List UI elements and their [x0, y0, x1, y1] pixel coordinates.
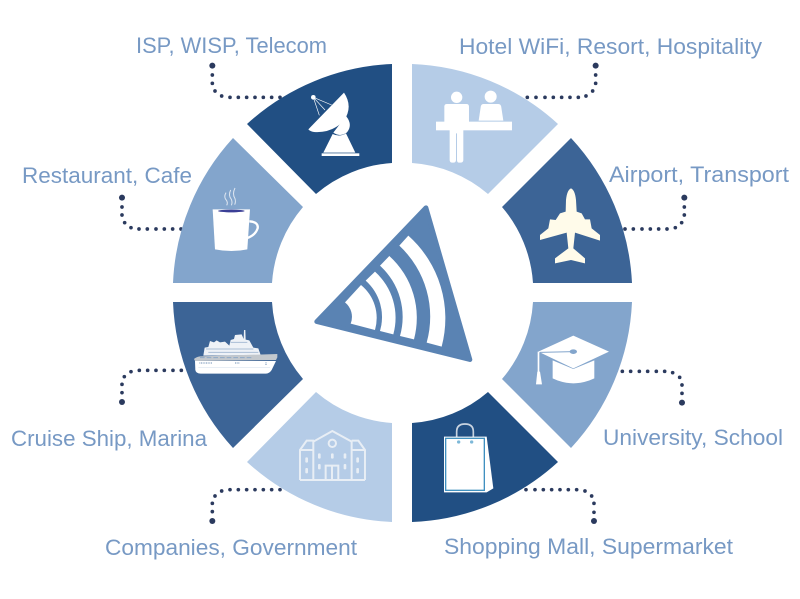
segment: Companies — [247, 392, 392, 522]
connector: Restaurant — [119, 195, 183, 231]
label: University: University, School — [603, 425, 783, 450]
icon: shopping bag — [444, 424, 493, 492]
connector: Hotel — [525, 63, 599, 99]
label: Companies: Companies, Government — [105, 535, 357, 560]
connector: Cruise — [119, 368, 183, 405]
icon: graduation cap — [536, 336, 609, 384]
connector: Shopping — [524, 488, 597, 524]
label: Hotel: Hotel WiFi, Resort, Hospitality — [459, 34, 762, 59]
segment: Airport — [502, 138, 632, 283]
segment: Hotel — [412, 64, 558, 194]
segment: Cruise — [173, 302, 303, 448]
icon: hotel reception — [436, 91, 512, 163]
connector: ISP — [209, 63, 282, 99]
icon: satellite dish — [308, 93, 359, 156]
connector: Airport — [623, 195, 687, 231]
icon: government building — [300, 431, 365, 480]
label: Shopping: Shopping Mall, Supermarket — [444, 534, 733, 559]
connector: Companies — [209, 488, 282, 524]
segment: Shopping — [412, 392, 558, 522]
connector: University — [620, 369, 685, 406]
icon: cruise ship — [194, 330, 277, 374]
label: ISP: ISP, WISP, Telecom — [136, 33, 327, 58]
label: Airport: Airport, Transport — [609, 162, 789, 187]
central wifi signal triangle — [317, 208, 470, 360]
segment: University — [502, 302, 632, 448]
segment: Restaurant — [173, 138, 303, 283]
segment: ISP — [247, 64, 392, 194]
label: Cruise: Cruise Ship, Marina — [11, 426, 208, 451]
icon: airplane — [540, 188, 600, 263]
icon: coffee cup — [213, 188, 258, 251]
label: Restaurant: Restaurant, Cafe — [22, 163, 192, 188]
